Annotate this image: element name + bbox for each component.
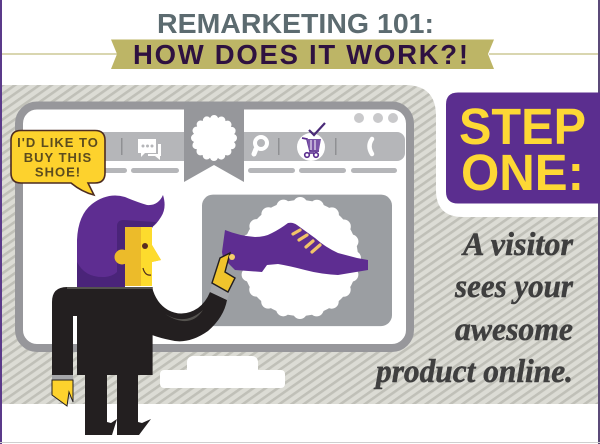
badge xyxy=(194,118,234,158)
face highlight xyxy=(141,227,161,286)
title ribbon xyxy=(111,40,494,69)
icon: chat xyxy=(138,139,161,160)
title line two: HOW DOES IT WORK?! xyxy=(133,39,468,70)
title xyxy=(2,8,598,70)
monitor xyxy=(19,102,410,388)
torso and left arm xyxy=(52,287,153,375)
ribbon connector left xyxy=(2,53,117,55)
toolbar separators xyxy=(121,138,336,155)
step description text xyxy=(373,227,574,390)
line two: sees your xyxy=(454,269,574,305)
face xyxy=(125,227,161,286)
hair xyxy=(77,195,165,290)
toolbar underline bars xyxy=(100,168,397,173)
speech text: SHOE! xyxy=(35,164,81,180)
arm highlight xyxy=(165,310,203,321)
product image panel xyxy=(202,195,392,326)
ear xyxy=(114,250,130,264)
right hand xyxy=(212,253,235,292)
line three: awesome xyxy=(455,312,573,348)
shoe xyxy=(222,223,368,275)
speech text: BUY THIS xyxy=(24,150,92,165)
monitor stand xyxy=(160,356,285,388)
right arm xyxy=(152,287,227,341)
speech bubble xyxy=(11,130,105,195)
toolbar xyxy=(30,132,405,161)
scalloped product badge xyxy=(242,200,358,316)
line four: product online. xyxy=(373,354,573,390)
window dots xyxy=(354,113,398,123)
left cuff xyxy=(52,375,73,380)
hatched background band xyxy=(2,85,598,404)
thumb xyxy=(229,254,235,260)
ribbon connector right xyxy=(489,53,598,55)
line one: A visitor xyxy=(461,227,574,263)
speech text: I'D LIKE TO xyxy=(17,135,99,150)
smile xyxy=(143,268,151,275)
bookmark ribbon xyxy=(184,102,244,182)
icon: cart with checkmark xyxy=(297,123,325,161)
hair shadow xyxy=(77,220,156,290)
one word: ONE: xyxy=(461,144,584,201)
left hand xyxy=(52,380,73,406)
person xyxy=(52,195,235,435)
title line one: REMARKETING 101: xyxy=(157,8,434,39)
icon: phone xyxy=(370,139,372,154)
shoe laces xyxy=(293,230,320,252)
right cuff xyxy=(210,284,230,300)
icon: magnifier xyxy=(254,137,267,154)
shoulder band xyxy=(67,287,152,289)
step word: STEP xyxy=(459,98,586,155)
legs and feet xyxy=(85,375,151,435)
eye xyxy=(142,243,148,249)
step one panel xyxy=(446,92,600,204)
